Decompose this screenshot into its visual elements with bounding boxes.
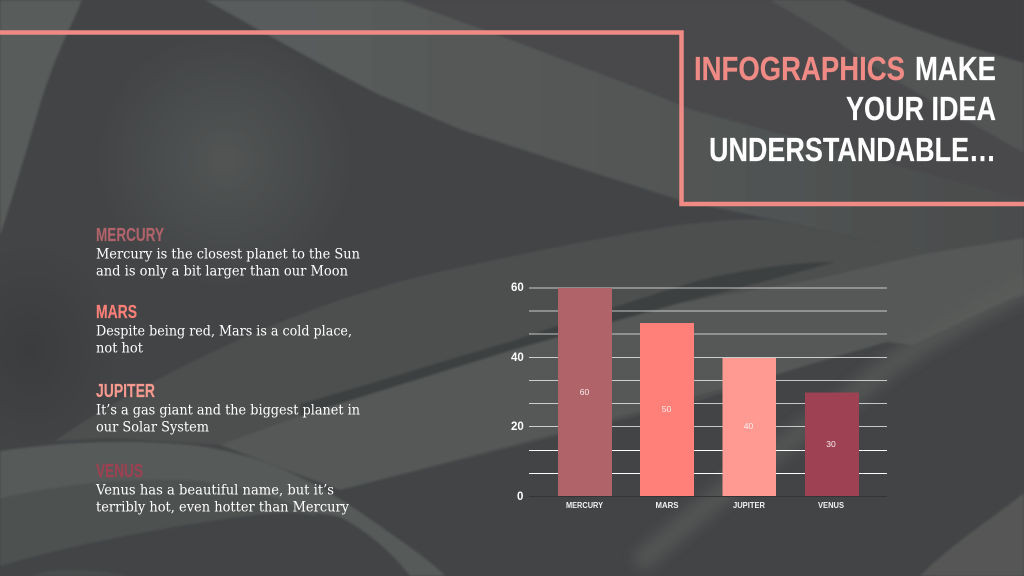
text block: Mercury [96,225,360,280]
title: MAKE [915,50,996,87]
title: INFOGRAPHICS [694,50,905,87]
y axis labels: 60 [511,282,524,294]
text block: Mars: MARS [96,302,137,322]
y axis labels: 20 [511,421,524,433]
text block: Venus [95,461,349,516]
y axis labels: 0 [517,491,523,503]
title: YOUR IDEA [846,90,996,127]
category labels: MERCURY [566,501,604,510]
category labels: MARS [656,501,679,510]
text block: Jupiter [96,381,360,436]
category labels: JUPITER [733,501,765,510]
text block: Mars [96,302,352,356]
text block: Mars: not hot [96,340,144,356]
bar: Mars 50 [640,323,694,496]
bar: Jupiter 40: 40 [744,421,753,431]
y axis labels: 40 [511,352,524,364]
text block: Mercury: Mercury is the closest planet to the Sun [96,246,360,262]
text block: Mars: Despite being red, Mars is a cold place, [96,324,352,340]
text block: Jupiter: our Solar System [96,420,209,436]
text block: Venus: Venus has a beautiful name, but it’s [95,482,334,498]
text block: Venus: terribly hot, even hotter than Mercury [96,500,349,516]
title frame [0,32,1024,204]
text block: Mercury: and is only a bit larger than our Moon [96,264,348,280]
bar: Mercury 60 [558,288,612,496]
bar chart [511,282,887,510]
bar: Venus 30 [805,392,859,496]
category labels: VENUS [818,501,845,510]
bar: Jupiter 40 [722,358,776,496]
text block: Jupiter: JUPITER [96,381,155,401]
text block: Venus: VENUS [96,461,143,481]
bar: Mars 50: 50 [662,404,671,414]
bar: Mercury 60: 60 [580,387,589,397]
text block: Jupiter: It’s a gas giant and the biggest planet in [96,402,360,418]
title [694,50,996,168]
bar: Venus 30: 30 [826,439,836,449]
y axis labels [511,282,524,503]
category labels [566,501,845,510]
text block: Mercury: MERCURY [96,225,164,245]
